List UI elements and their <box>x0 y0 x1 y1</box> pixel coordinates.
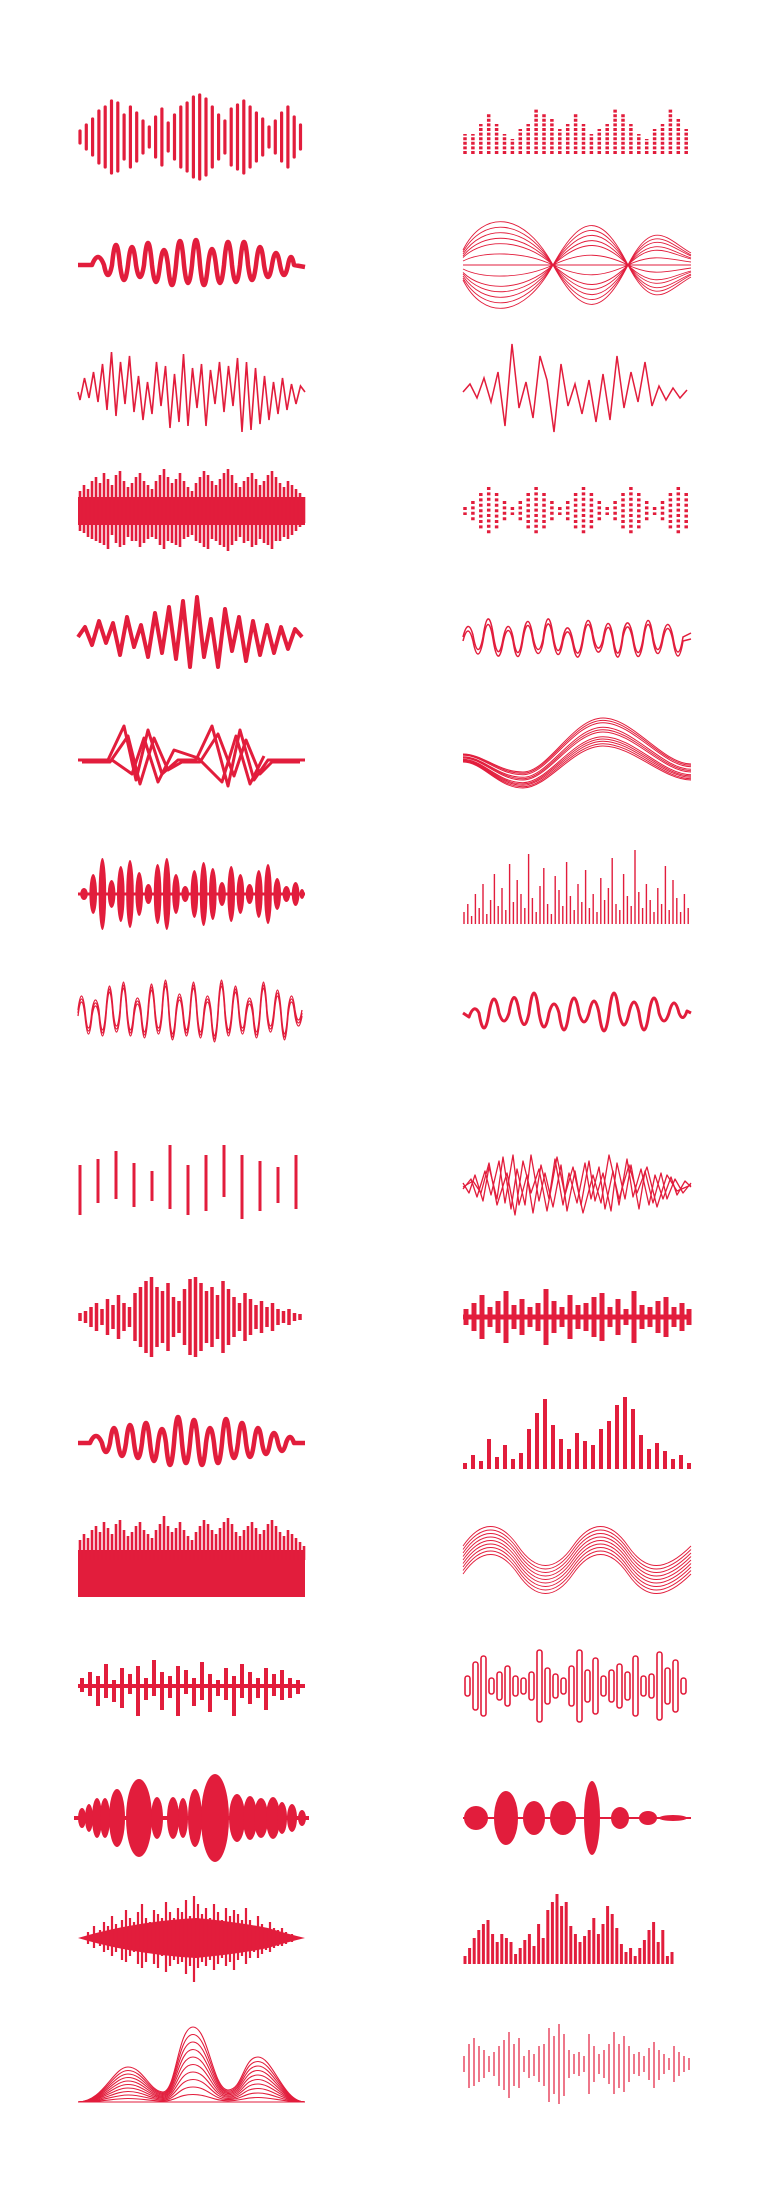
wave R5: double wiggly line <box>463 619 691 657</box>
wave R3: sparse zigzag <box>463 344 687 432</box>
wave L6: crossing triangle lines <box>78 726 305 786</box>
wave L11: modulated sine <box>78 1417 305 1465</box>
wave R1: dotted equalizer columns <box>465 109 686 154</box>
wave R2: ribbon of lines <box>463 222 691 308</box>
wave L12: filled jagged from baseline <box>78 1516 305 1597</box>
wave L2: modulated sine <box>78 240 305 285</box>
wave L5: thick zigzag <box>78 597 302 667</box>
wave L15: spiky symmetric <box>78 1896 305 1982</box>
wave L10: symmetric envelope bars <box>80 1277 300 1357</box>
wave L3: dense thin zigzag <box>78 352 305 432</box>
wave R16: thin symmetric lines <box>464 2024 689 2104</box>
wave R6: twisted ribbon <box>463 718 691 788</box>
wave R4: dotted diamond columns <box>465 487 686 535</box>
wave L7: ellipses on line <box>78 858 305 930</box>
wave R7: thin bars from baseline <box>464 850 688 924</box>
wave R8: thick wiggle <box>463 993 691 1031</box>
wave L16: layered hills <box>78 2027 305 2102</box>
wave R10: thick bars on line <box>463 1289 691 1345</box>
wave R11: bars from baseline <box>465 1397 689 1469</box>
wave R12: sine ribbon <box>463 1526 691 1594</box>
wave L8: layered wavy lines <box>78 980 302 1042</box>
wave L9: sparse vertical lines <box>80 1145 296 1219</box>
wave L13: bars on thick line <box>78 1660 305 1716</box>
wave R15: bars from baseline with dots <box>465 1894 672 1964</box>
wave R13: capsule outlines <box>465 1650 686 1722</box>
wave R9: chaotic thin lines <box>463 1155 691 1215</box>
wave L14: big ovals <box>74 1774 309 1862</box>
wave L4: dense noise <box>78 469 305 551</box>
wave L1: symmetric bars <box>80 95 300 179</box>
wave R14: lens blobs <box>463 1781 691 1855</box>
